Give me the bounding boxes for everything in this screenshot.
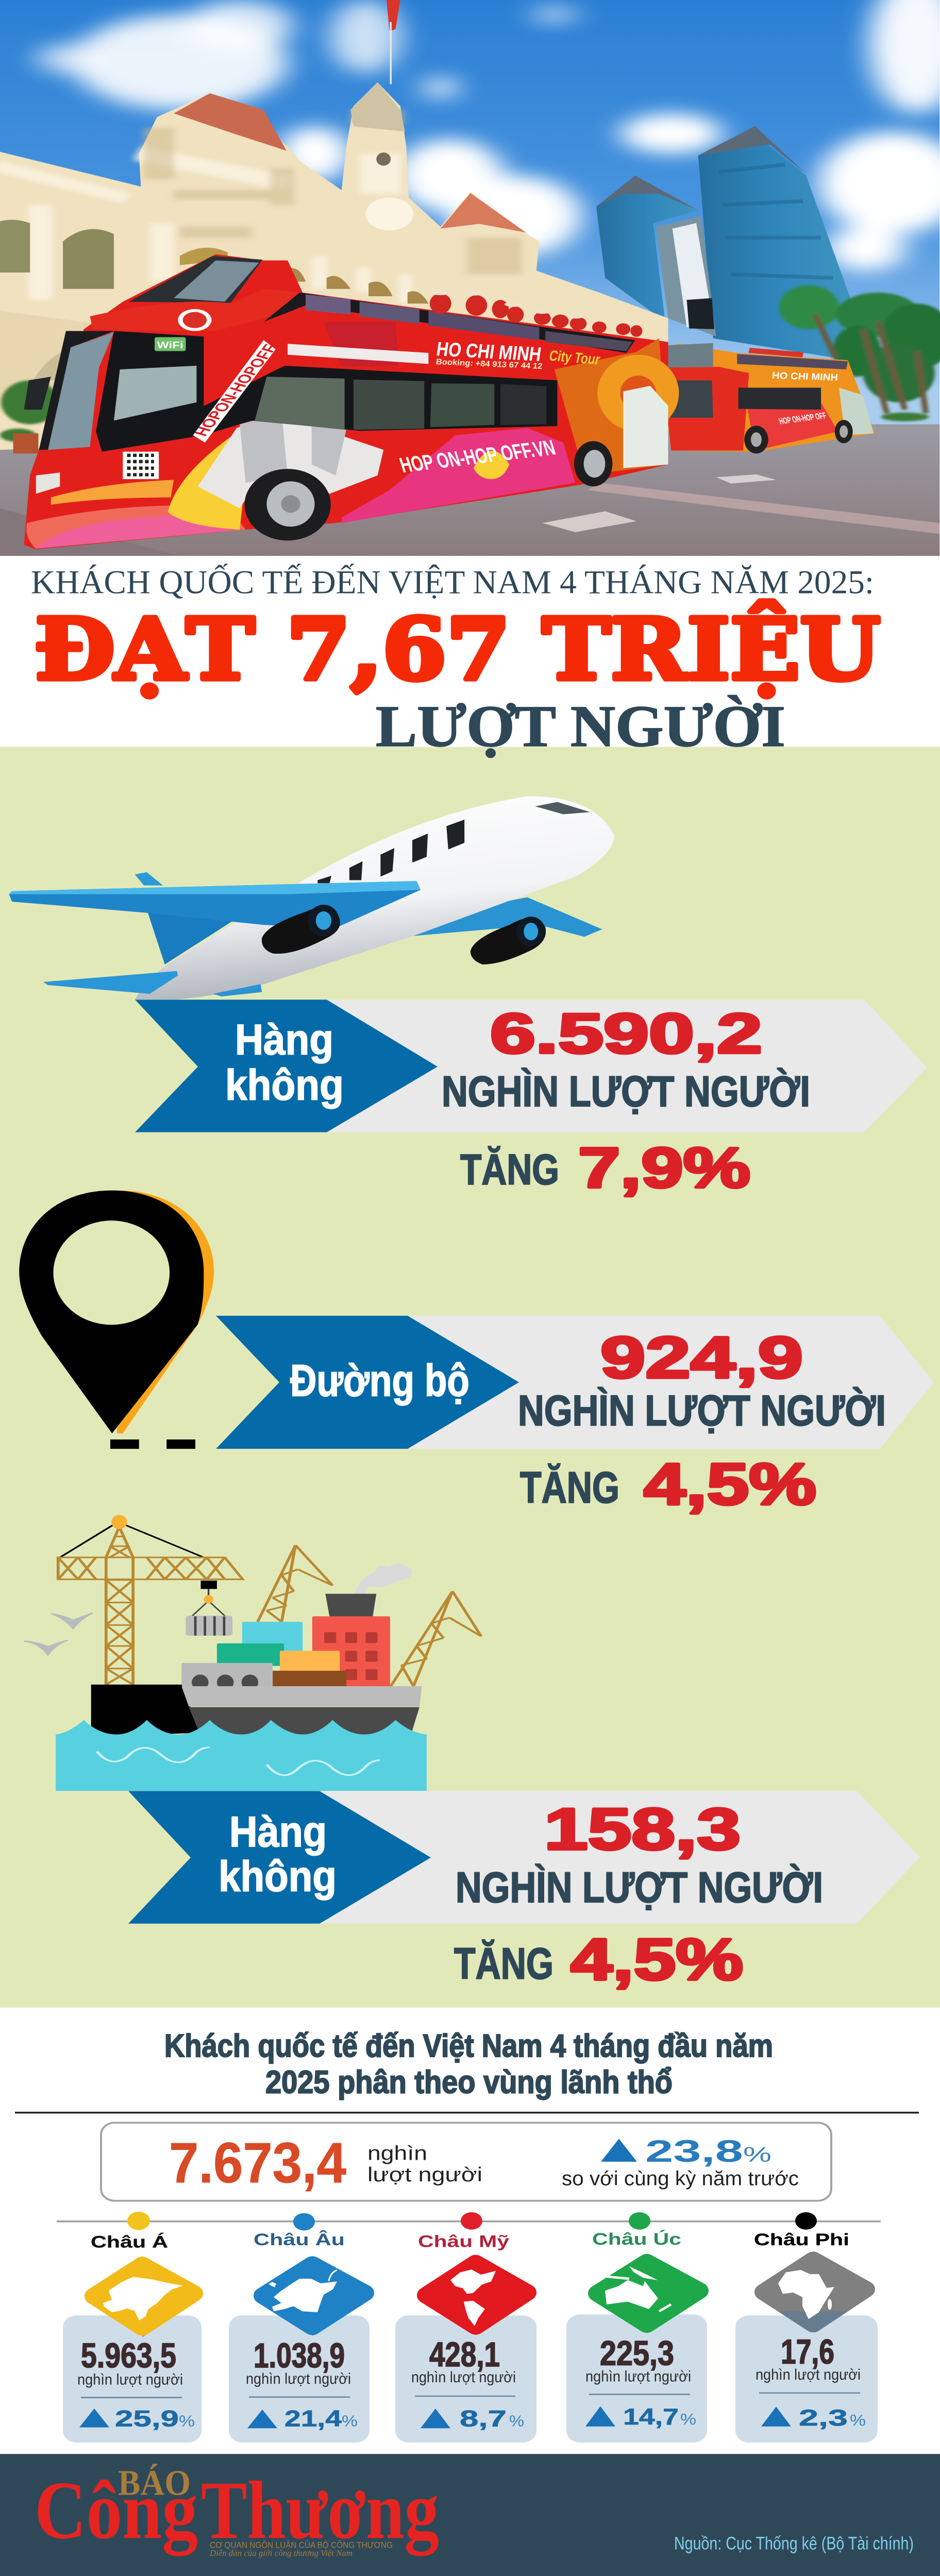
main bus bbox=[24, 254, 679, 549]
arrow: air bbox=[135, 999, 927, 1132]
card: Europe bbox=[229, 2231, 374, 2443]
card: Americas bbox=[395, 2232, 536, 2443]
section heading: by region: Khách quốc tế đến Việt Nam 4 tháng đầu năm bbox=[164, 2028, 773, 2064]
card: Oceania: nghìn lượt người bbox=[585, 2368, 691, 2385]
icon: Europe diamond bbox=[263, 2256, 374, 2336]
growth: air: TĂNG bbox=[460, 1145, 559, 1193]
card: Asia: nghìn lượt người bbox=[77, 2371, 183, 2388]
arrow: air: 6.590,2 bbox=[490, 1002, 762, 1065]
section heading: by region: 2025 phân theo vùng lãnh thổ bbox=[265, 2064, 673, 2100]
main bus: Booking: +84 913 67 44 12 bbox=[435, 358, 543, 371]
second bus: HOP ON-HOP OFF bbox=[778, 411, 828, 426]
card: Europe: nghìn lượt người bbox=[246, 2370, 351, 2387]
card: Americas: nghìn lượt người bbox=[411, 2369, 516, 2386]
title line 2: red headline: ĐẠT 7,67 TRIỆU bbox=[35, 600, 880, 699]
plane illustration bbox=[9, 796, 614, 999]
growth: road: 4,5% bbox=[644, 1451, 816, 1517]
card: Asia bbox=[63, 2233, 203, 2443]
total summary box bbox=[101, 2123, 831, 2201]
card: Africa: nghìn lượt người bbox=[756, 2366, 861, 2383]
logo: Báo Công Thương: BÁO bbox=[118, 2463, 191, 2502]
card: Europe: Châu Âu bbox=[254, 2231, 345, 2249]
second bus: HO CHI MINH bbox=[771, 370, 838, 383]
main bus: HOP ON-HOP OFF.VN bbox=[397, 435, 558, 477]
icon: Asia diamond bbox=[94, 2256, 203, 2337]
icon: Africa diamond bbox=[764, 2251, 874, 2332]
icon: port with ship and cranes bbox=[24, 1515, 481, 1791]
card: Asia: 25,9 bbox=[115, 2406, 179, 2432]
logo: Báo Công Thương: Diễn đàn của giới công thương Việt Nam bbox=[209, 2548, 352, 2558]
hero photo: double-decker buses in front of city hall bbox=[0, 0, 940, 556]
card: Europe: 21,4 bbox=[284, 2406, 342, 2432]
arrow: sea bbox=[128, 1791, 920, 1924]
card: Americas: 8,7 bbox=[460, 2406, 507, 2432]
logo: Báo Công Thương: Thương bbox=[201, 2464, 439, 2556]
title line 1: KHÁCH QUỐC TẾ ĐẾN VIỆT NAM 4 THÁNG NĂM 2025: bbox=[31, 564, 874, 600]
main bus: HOPON-HOPOFF bbox=[191, 343, 281, 438]
logo: Báo Công Thương bbox=[35, 2463, 439, 2558]
card: Oceania: 225,3 bbox=[600, 2334, 674, 2372]
card: Americas: Châu Mỹ bbox=[418, 2232, 509, 2251]
green panel: transport modes bbox=[0, 747, 940, 2008]
card: Europe: % bbox=[342, 2412, 358, 2430]
card: Europe: 1.038,9 bbox=[254, 2337, 345, 2375]
arrow: road: Đường bộ bbox=[290, 1355, 469, 1406]
main bus: HO CHI MINH bbox=[435, 338, 543, 366]
growth: air bbox=[460, 1136, 750, 1199]
arrow: air: Hàng bbox=[235, 1015, 333, 1063]
card: Oceania: 14,7 bbox=[623, 2404, 679, 2430]
card: Oceania: Châu Úc bbox=[592, 2230, 681, 2249]
arrow: sea: 158,3 bbox=[544, 1796, 741, 1862]
icon: Americas diamond bbox=[426, 2255, 536, 2335]
main bus: WiFi bbox=[157, 340, 183, 350]
growth: sea bbox=[454, 1926, 743, 1992]
section heading: by region bbox=[164, 2028, 773, 2100]
arrow: sea: Hàng bbox=[229, 1807, 327, 1856]
footer band bbox=[0, 2454, 940, 2576]
logo: Báo Công Thương: CƠ QUAN NGÔN LUẬN CỦA BỘ CÔNG THƯƠNG bbox=[210, 2540, 393, 2550]
growth: sea: TĂNG bbox=[454, 1939, 553, 1988]
arrow: sea: NGHÌN LƯỢT NGƯỜI bbox=[456, 1863, 823, 1911]
growth: sea: 4,5% bbox=[570, 1926, 743, 1992]
arrow: sea: không bbox=[219, 1852, 337, 1900]
arrow: road bbox=[216, 1316, 934, 1449]
logo: Báo Công Thương: Công bbox=[35, 2464, 198, 2556]
card: Americas: % bbox=[509, 2412, 524, 2430]
icon: map pin bbox=[19, 1191, 214, 1449]
card: Asia: Châu Á bbox=[91, 2233, 168, 2251]
second bus bbox=[659, 343, 875, 453]
card: Oceania: % bbox=[680, 2411, 696, 2428]
arrow: road: 924,9 bbox=[600, 1325, 803, 1391]
total summary box: lượt người bbox=[367, 2163, 482, 2186]
total summary box: 23,8 bbox=[645, 2133, 743, 2168]
icon: Oceania diamond bbox=[597, 2253, 708, 2333]
arrow: air: không bbox=[225, 1060, 344, 1109]
growth: road bbox=[520, 1451, 816, 1517]
card: Asia: 5.963,5 bbox=[81, 2337, 176, 2375]
total summary box: so với cùng kỳ năm trước bbox=[562, 2167, 799, 2190]
growth: road: TĂNG bbox=[520, 1463, 619, 1512]
card: Americas: 428,1 bbox=[429, 2336, 500, 2374]
growth: air: 7,9% bbox=[578, 1136, 750, 1199]
card: Oceania bbox=[566, 2230, 708, 2443]
arrow: air: NGHÌN LƯỢT NGƯỜI bbox=[442, 1067, 810, 1115]
card: Africa: Châu Phi bbox=[754, 2231, 849, 2249]
main bus: City Tour bbox=[547, 347, 602, 368]
card: Africa: % bbox=[850, 2412, 866, 2429]
timeline bbox=[57, 2212, 881, 2230]
card: Africa: 2,3 bbox=[799, 2405, 848, 2431]
card: Africa: 17,6 bbox=[781, 2333, 834, 2371]
total summary box: nghìn bbox=[367, 2142, 427, 2164]
total summary box: 7.673,4 bbox=[169, 2131, 346, 2194]
title line 3: LƯỢT NGƯỜI bbox=[376, 694, 785, 759]
card: Africa bbox=[735, 2231, 878, 2443]
total summary box: % bbox=[743, 2143, 771, 2166]
card: Asia: % bbox=[179, 2412, 195, 2430]
